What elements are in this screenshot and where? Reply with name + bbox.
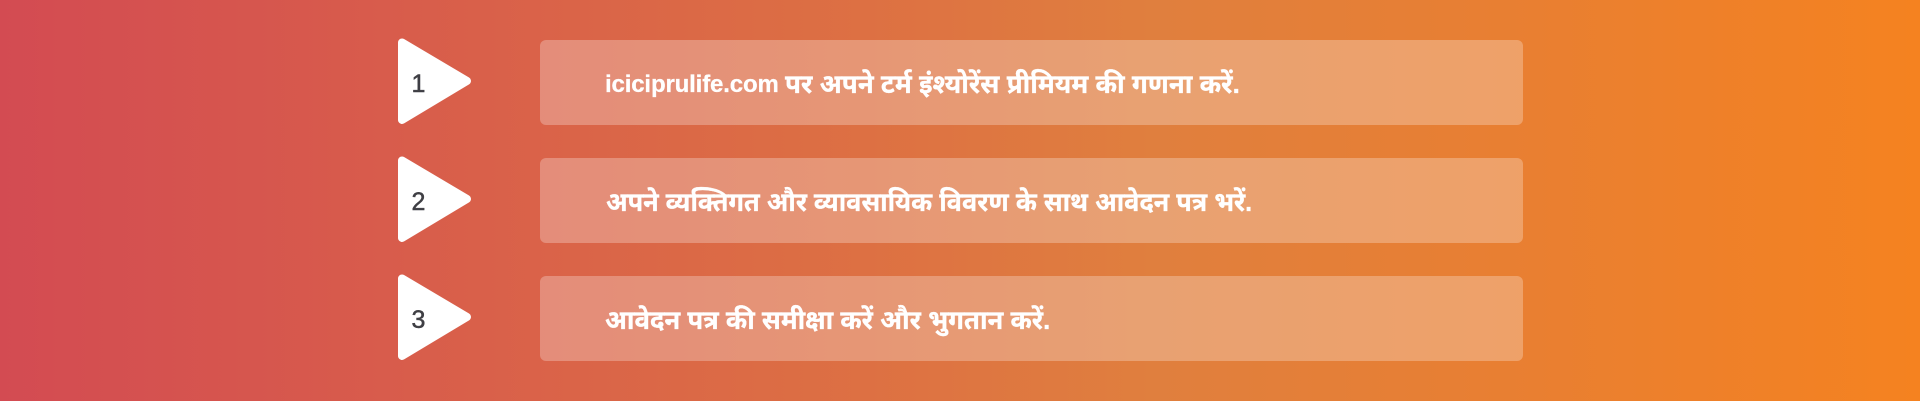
step 1 panel	[540, 40, 1523, 125]
step 3 panel	[540, 276, 1523, 361]
step 2 panel	[540, 158, 1523, 243]
step 1 arrow with number	[398, 38, 471, 124]
step 1 panel: iciciprulife.com	[605, 71, 779, 98]
step 1 panel: पर अपने टर्म इंश्योरेंस प्रीमियम की गणना करें.	[785, 69, 1240, 99]
step 2 panel: अपने व्यक्तिगत और व्यावसायिक विवरण के साथ आवेदन पत्र भरें.	[606, 187, 1252, 217]
step 2 arrow with number: 2	[412, 188, 425, 216]
step 3 panel: आवेदन पत्र की समीक्षा करें और भुगतान करें.	[605, 305, 1050, 335]
step 3 arrow with number: 3	[412, 306, 425, 334]
step 1 arrow with number: 1	[412, 70, 425, 98]
step 3 arrow with number	[398, 274, 471, 360]
step 2 arrow with number	[398, 156, 471, 242]
